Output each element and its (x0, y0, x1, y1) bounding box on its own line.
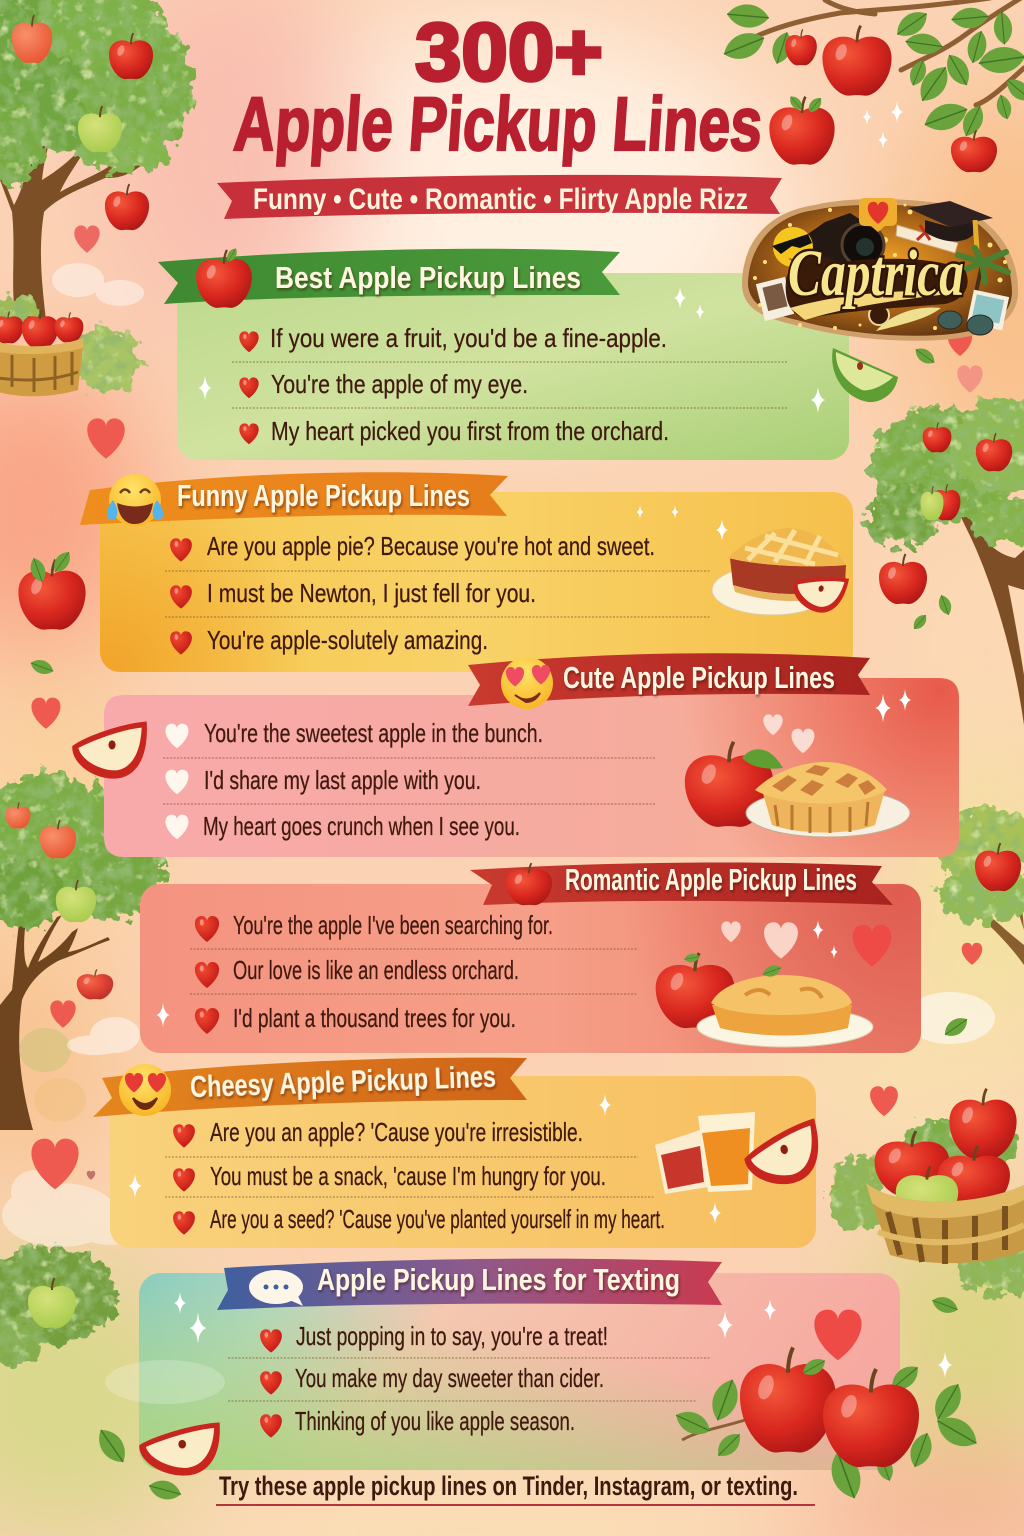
ribbon: cute (468, 653, 870, 709)
subtitle banner (217, 175, 782, 219)
line 2: You're the apple of my eye. (271, 369, 528, 399)
ribbon: funny: Funny Apple Pickup Lines (177, 478, 470, 513)
panel: cheesy apple pickup lines (93, 1058, 827, 1248)
icon: speech bubble (249, 1270, 303, 1306)
line 2: You make my day sweeter than cider. (295, 1363, 604, 1393)
panel: funny apple pickup lines (80, 472, 853, 672)
line 2: I must be Newton, I just fell for you. (207, 578, 536, 608)
line 2: Our love is like an endless orchard. (233, 955, 519, 985)
panel: cute apple pickup lines (72, 653, 959, 857)
logo backing swoosh (786, 256, 968, 318)
icon: apple and lattice pie (685, 742, 910, 837)
ribbon: cute: Cute Apple Pickup Lines (563, 660, 835, 695)
icon: photo right (967, 290, 1009, 330)
panel: romantic apple pickup lines (140, 862, 921, 1053)
line 3 (173, 1204, 665, 1235)
footer note: Try these apple pickup lines on Tinder, Instagram, or texting. (219, 1471, 798, 1501)
ribbon: cheesy (93, 1058, 527, 1117)
title: Apple Pickup Lines (231, 82, 765, 167)
icon: title apple (769, 94, 835, 165)
apples cluster: bottom right (672, 1310, 983, 1503)
line 2: You must be a snack, 'cause I'm hungry for you. (210, 1161, 606, 1191)
line 2 (166, 765, 481, 795)
line 1 (173, 1117, 583, 1148)
line 2: I'd share my last apple with you. (204, 765, 481, 795)
icon: apple and golden pie (656, 952, 873, 1047)
line 3: My heart goes crunch when I see you. (203, 811, 520, 841)
subtitle banner: Funny • Cute • Romantic • Flirty Apple Rizz (253, 183, 748, 216)
icon: camera (805, 213, 884, 266)
line 1 (195, 910, 553, 942)
icon: sunglasses (938, 311, 993, 335)
line 1: Just popping in to say, you're a treat! (296, 1321, 608, 1351)
icon: graduation cap (908, 201, 993, 250)
icon: scroll (896, 225, 958, 253)
bush with green apple: bottom left (0, 1247, 118, 1365)
line 1 (166, 718, 543, 748)
line 2 (195, 955, 519, 988)
panel: best apple pickup lines (158, 246, 898, 460)
line 1: You're the sweetest apple in the bunch. (204, 718, 543, 748)
decorative apples and leaves (18, 344, 971, 1317)
title (231, 7, 765, 167)
line 3: My heart picked you first from the orchard. (271, 416, 669, 446)
line 3: You're apple-solutely amazing. (207, 625, 488, 655)
tree: right middle (867, 397, 1024, 725)
icon: apple slice left (72, 721, 147, 779)
line 1: If you were a fruit, you'd be a fine-apple. (270, 323, 667, 353)
icon: apple pie slice (712, 528, 849, 618)
icon: cider glasses and apple slice (655, 1112, 827, 1194)
line 1: You're the apple I've been searching for. (233, 910, 553, 940)
icon: heart speech bubble (859, 198, 897, 232)
tree: right lower (935, 807, 1024, 965)
logo: Captrica (742, 198, 1018, 341)
ribbon: romantic (470, 862, 893, 905)
icon: aperture (869, 305, 889, 325)
line 3: Thinking of you like apple season. (295, 1406, 575, 1436)
ribbon: funny (80, 472, 508, 526)
tree: top left (0, 0, 193, 320)
icon: sunglasses emoji (772, 227, 813, 267)
ribbon: texting (217, 1259, 722, 1310)
logo wordmark: Captrica (788, 237, 964, 310)
line 1: Are you apple pie? Because you're hot and sweet. (207, 531, 655, 561)
ribbon: cheesy: Cheesy Apple Pickup Lines (189, 1059, 496, 1104)
tree: left lower (0, 773, 163, 1130)
icon: green apple slice (832, 348, 898, 402)
branch: top right (720, 0, 1024, 172)
line 3 (260, 1406, 575, 1438)
line 1 (260, 1321, 608, 1353)
line 1: Are you an apple? 'Cause you're irresistible. (210, 1117, 583, 1147)
basket with apples: bottom right (828, 1089, 1024, 1295)
basket: top left (0, 295, 140, 396)
line 3: Are you a seed? 'Cause you've planted yourself in my heart. (210, 1204, 665, 1234)
icon: feather (876, 307, 941, 331)
ribbon: romantic: Romantic Apple Pickup Lines (565, 862, 857, 897)
ribbon: texting: Apple Pickup Lines for Texting (317, 1262, 680, 1297)
ribbon: best: Best Apple Pickup Lines (275, 260, 581, 295)
icon: palm (958, 248, 1008, 310)
apple slice and leaves: bottom left (92, 1422, 220, 1503)
line 2 (260, 1363, 604, 1395)
line 2 (173, 1161, 606, 1192)
icon: photo left (756, 277, 794, 321)
line 3: I'd plant a thousand trees for you. (233, 1003, 516, 1033)
title: 300+ (415, 7, 603, 98)
panel: apple pickup lines for texting (105, 1259, 952, 1470)
line 3 (195, 1003, 516, 1034)
line 3 (166, 811, 520, 841)
decorative hearts (31, 225, 983, 1189)
clouds (2, 263, 995, 1247)
ribbon: best (158, 246, 620, 308)
